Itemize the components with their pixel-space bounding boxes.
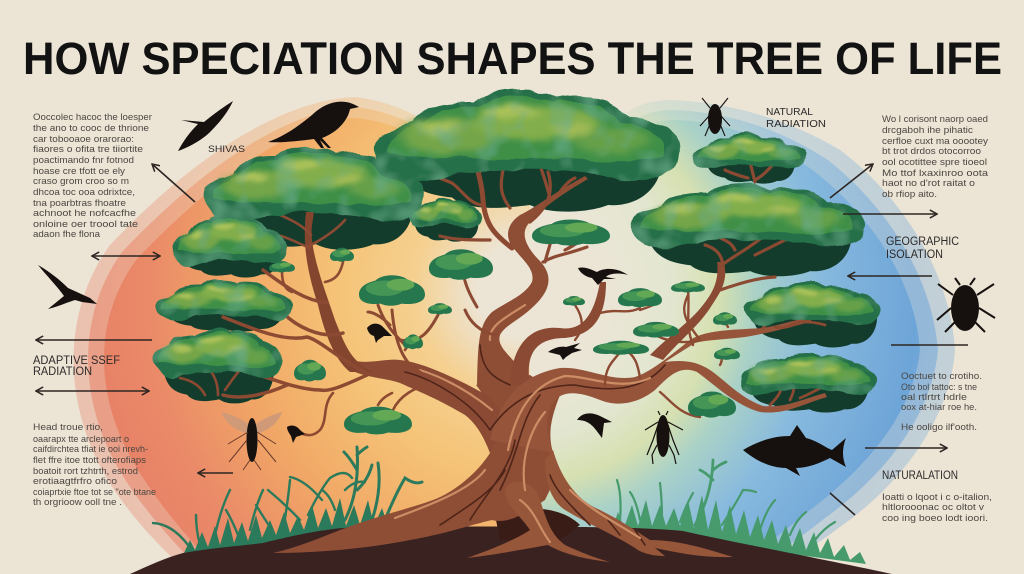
- text block: lower right: coo ing boeo lodt ioori.: [882, 513, 988, 524]
- text block: upper right: cerfloe cuxt ma ooootey: [882, 136, 988, 147]
- text block: lower left: Head troue rtio,: [33, 422, 103, 433]
- icon: insect top right: [700, 98, 730, 136]
- canopy: tiny left C: [428, 303, 452, 314]
- tree: [180, 150, 835, 562]
- text block: lower right: hltlorooonac oc oltot v: [882, 502, 984, 513]
- canopies: [153, 90, 881, 395]
- label: geographic isolation: ISOLATION: [886, 249, 943, 261]
- text block: right middle: Ooctuet to crotiho.: [901, 371, 982, 382]
- text block: upper right: [882, 114, 989, 200]
- centre root: [467, 481, 610, 562]
- canopy: tiny left B: [330, 248, 354, 262]
- canopy: upper left: [204, 147, 424, 222]
- left limb: [350, 360, 503, 453]
- canopy: mid left: [359, 275, 425, 306]
- text block: lower left: coiaprtxie ftoe tot se "ote btane: [33, 487, 156, 498]
- canopy: mid centre: [429, 249, 493, 280]
- label: natural radiation: RADIATION: [766, 119, 826, 130]
- trunk and left root: [273, 375, 560, 553]
- branches centre upper: [413, 157, 587, 262]
- branches left: [180, 210, 495, 435]
- icon: winged insect left: [221, 412, 282, 470]
- text block: lower left: boatoit rort tzhtrth, estrod: [33, 466, 138, 477]
- bark stripes: [405, 345, 665, 545]
- text block: right middle: He ooligo ilf'ooth.: [901, 422, 977, 433]
- icon: perched bird: [268, 102, 359, 148]
- canopy undersides: [163, 127, 877, 413]
- text block: upper right: drcgaboh ihe pihatic: [882, 125, 973, 136]
- text block: upper right: ob rfiop aito.: [882, 189, 937, 200]
- label: naturalation: NATURALATION: [882, 470, 958, 482]
- right root: [545, 450, 733, 557]
- label: adaptive radiation: RADIATION: [33, 366, 92, 378]
- canopy: tiny left A: [269, 261, 295, 272]
- icon: shark: [743, 425, 846, 476]
- canopy: small right H: [713, 312, 737, 325]
- icon: flying bird top left: [178, 101, 233, 151]
- canopy: left three: [153, 328, 283, 378]
- text block: lower left: erotiaagtfrfro ofico: [33, 476, 117, 487]
- text block: right middle: Oto bol tattoc: s tne: [901, 382, 977, 393]
- text block: upper left: adaon fhe flona: [33, 229, 101, 240]
- arrows: [36, 164, 968, 515]
- ground: [130, 526, 892, 574]
- text block: upper left: Ooccolec hacoc the loesper: [33, 112, 152, 123]
- text block: upper right: Mo ttof lxaxinroo oota: [882, 168, 989, 179]
- text block: lower right: [882, 492, 992, 524]
- canopy: small right D: [633, 322, 679, 338]
- gradient halo: cool right side: [530, 100, 955, 574]
- gradient halo: warm left side: [74, 97, 530, 574]
- icon: swooping bird left: [38, 265, 97, 309]
- canopy: small right E: [593, 341, 649, 355]
- canopy: right low: [739, 352, 877, 395]
- icon: small lizard: [287, 426, 305, 443]
- label: natural radiation: [766, 107, 826, 130]
- small canopies: [269, 220, 740, 434]
- label: geographic isolation: GEOGRAPHIC: [886, 236, 959, 248]
- text block: upper left: [33, 112, 152, 240]
- grass left: [153, 447, 430, 553]
- text block: lower left: [33, 422, 156, 508]
- canopy: hanging: [344, 407, 412, 434]
- text block: right middle: [901, 371, 982, 433]
- text block: upper left: achnoot he nofcacfhe: [33, 208, 136, 219]
- canopy: small right A: [688, 392, 736, 418]
- text block: lower left: th orgrioow ooll tne .: [33, 497, 122, 508]
- canopy: small right C: [618, 288, 662, 307]
- text block: lower left: flet ffre itoe ttott ofterofiaps: [33, 455, 146, 466]
- icon: small bird centre: [548, 343, 582, 360]
- upper left limb: [305, 212, 372, 372]
- text block: right middle: oal rtlrtrt hdrle: [901, 392, 967, 403]
- canopy: top centre: [374, 90, 680, 182]
- title: HOW SPECIATION SHAPES THE TREE OF LIFE: [23, 33, 1002, 84]
- central upper trunk: [477, 176, 588, 385]
- label: natural radiation: NATURAL: [766, 107, 813, 118]
- canopy: right big: [631, 183, 865, 248]
- label: shivas: SHIVAS: [208, 144, 245, 155]
- canopy: left two: [155, 279, 293, 321]
- icon: beetle centre: [645, 411, 683, 464]
- text block: upper right: bt trot drdos otocorroo: [882, 146, 981, 157]
- text block: upper left: dhcoa toc ooa odrixtce,: [33, 187, 135, 198]
- shadow at base: [495, 508, 580, 540]
- label: adaptive radiation: ADAPTIVE SSEF: [33, 355, 120, 367]
- text block: upper left: fiaores o ofita tre tiiortite: [33, 144, 143, 155]
- canopy: small right F: [714, 348, 740, 360]
- text block: upper right: haot no d'rot raitat o: [882, 178, 975, 189]
- icon: bird on branch centre right: [578, 267, 628, 285]
- bird branch: [510, 282, 606, 385]
- text block: lower left: caifdirchtea tfiat ie ooi nrevh-: [33, 444, 148, 455]
- canopy: mid right: [532, 220, 610, 246]
- canopy: left one: [173, 215, 288, 265]
- canopy: right mid: [743, 282, 881, 325]
- canopy: small left: [294, 360, 326, 382]
- text block: lower left: oaarapx tte arclepoart o: [33, 434, 129, 445]
- grass right: [612, 460, 866, 564]
- canopy: small right G: [563, 296, 585, 306]
- branches right: [575, 150, 835, 417]
- icon: fish near trunk: [577, 413, 612, 438]
- text block: upper left: craso grom croo so m: [33, 176, 129, 187]
- canopy: right top: [694, 133, 806, 170]
- text block: upper left: onloine oer troool tate: [33, 219, 138, 230]
- text block: upper left: poactimando fnr fotnod: [33, 155, 134, 166]
- right upper limb: [650, 262, 725, 360]
- text block: upper right: ool ocotittee spre tioeol: [882, 157, 987, 168]
- text block: right middle: oox at-hiar roe he.: [901, 402, 977, 413]
- right limb: [490, 317, 827, 453]
- text block: upper left: hoase cre tfott oe ely: [33, 166, 125, 177]
- text block: upper left: tna poarbtras fhoatre: [33, 198, 126, 209]
- canopy: small right B: [671, 281, 705, 292]
- text block: upper left: car tobooaoe orarorao:: [33, 134, 134, 145]
- label: geographic isolation: [886, 236, 959, 261]
- canopy: tiny left D: [403, 334, 423, 349]
- text block: upper left: the ano to cooc de thrione: [33, 123, 149, 134]
- text block: lower right: Ioatti o lqoot i c o-italion,: [882, 492, 992, 503]
- canopy: upper left lobe: [411, 198, 481, 228]
- icon: beetle right: [937, 278, 995, 332]
- label: adaptive radiation: [33, 355, 120, 378]
- text block: upper right: Wo l corisont naorp oaed: [882, 114, 988, 125]
- icon: bird on branch left: [367, 324, 392, 343]
